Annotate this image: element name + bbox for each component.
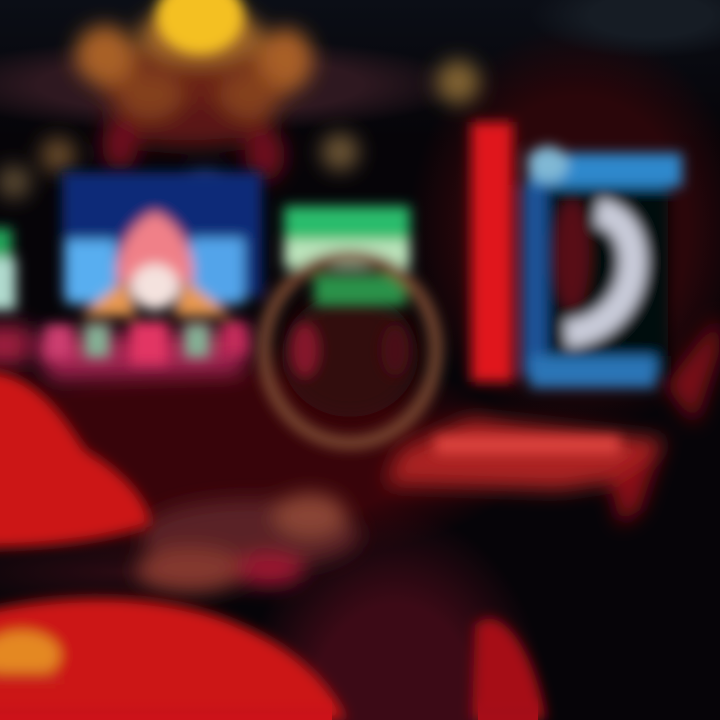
- bottom edge fill: right cushion: [478, 700, 538, 720]
- bottom red cushion: [0, 598, 346, 720]
- pink button row: [45, 322, 246, 364]
- red hat shape: [0, 371, 150, 548]
- table highlight: [435, 436, 620, 454]
- orange patch: [0, 631, 60, 679]
- brown ring: [264, 257, 436, 443]
- left arcade screen: [62, 172, 262, 316]
- pink button row base: [30, 330, 255, 380]
- red table base: [385, 418, 665, 490]
- centre green screen: [284, 206, 410, 306]
- hand and food detail: [135, 493, 360, 592]
- left edge screen: [0, 228, 16, 310]
- balloon cluster: [75, 5, 313, 181]
- brown ring inner: [282, 293, 418, 417]
- white crescent: [566, 212, 633, 334]
- red vertical bar: [471, 122, 513, 382]
- small lights: [0, 60, 480, 203]
- right blue frame screen: [522, 146, 682, 388]
- yellow lamp: [156, 0, 244, 54]
- bottom edge fill: cushion: [0, 700, 332, 720]
